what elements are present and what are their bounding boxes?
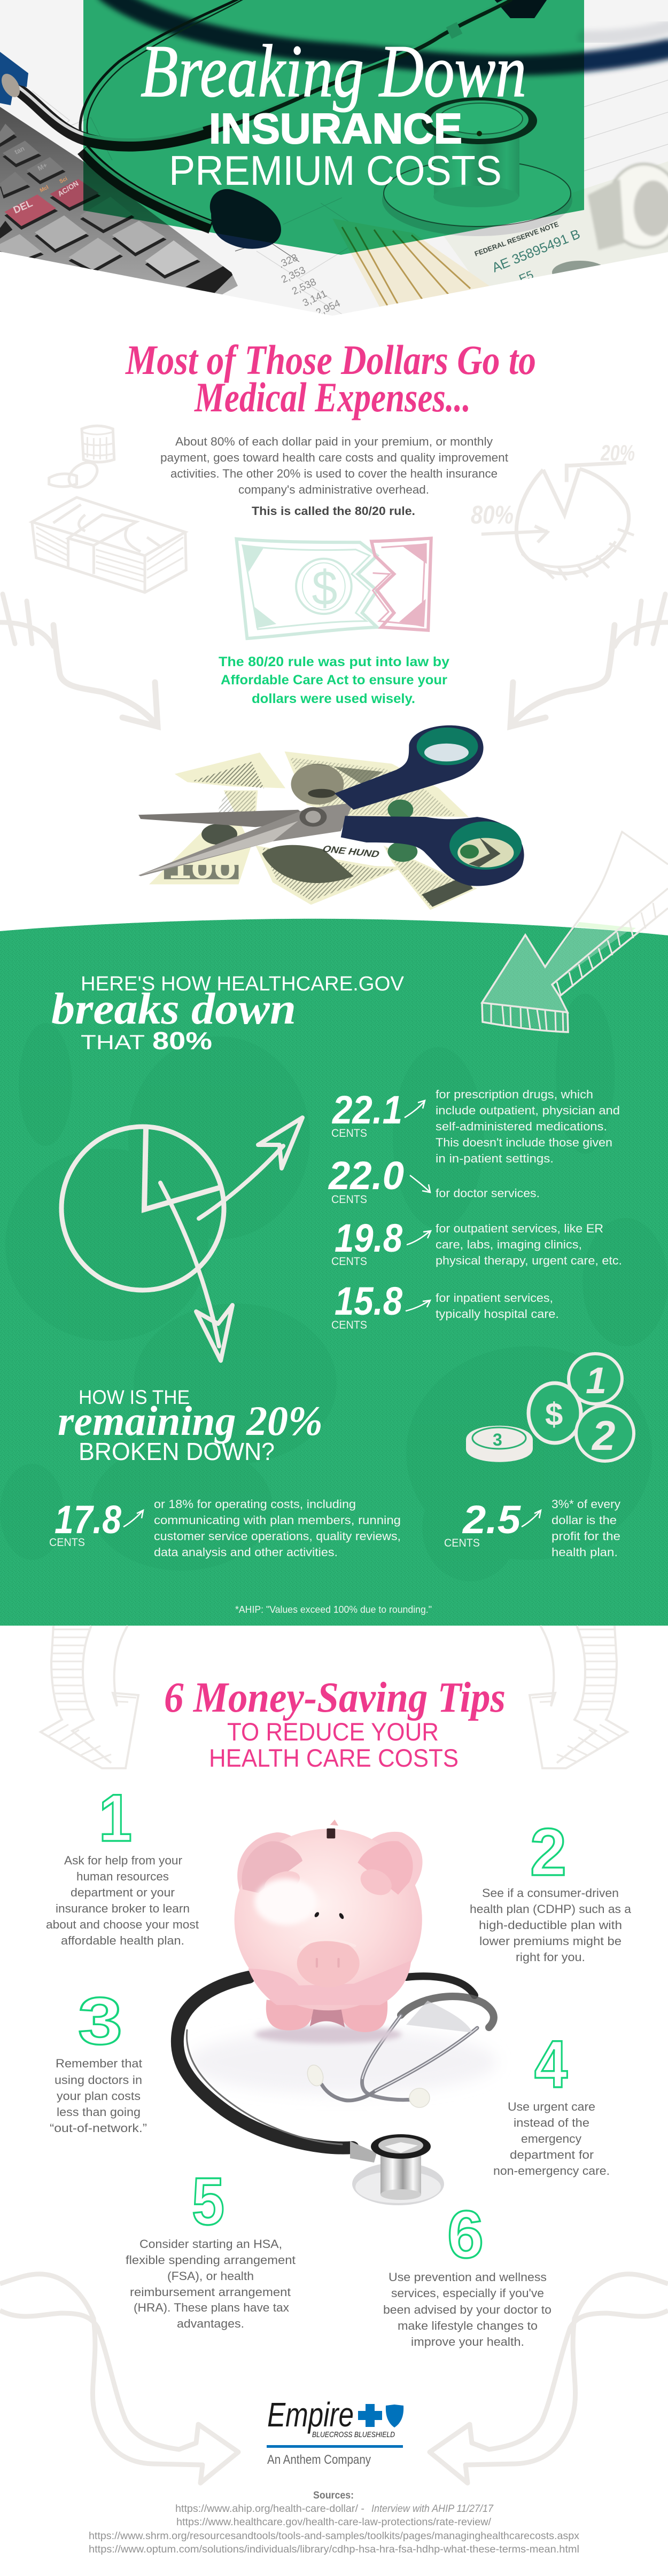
photo: chrome ear tube: [16, 85, 214, 227]
number 4: 4: [534, 2027, 568, 2102]
stat: 2.5 cents: health plan.: [552, 1545, 618, 1559]
tip 5: advantages.: [177, 2317, 244, 2330]
tip 6: services, especially if you've: [391, 2286, 544, 2300]
stat: 19.8 cents: [331, 1216, 622, 1268]
stat: 17.8 cents: communicating with plan members, running: [154, 1513, 401, 1527]
snout nostrils: [316, 1958, 318, 1968]
sources: Sources:: [313, 2490, 354, 2501]
icon: torn dollar bill: $: [312, 560, 337, 615]
heading: here's how healthcare.gov breaks down: THAT: [81, 1032, 145, 1054]
green callout: affordable care act: Affordable Care Act to ensure your: [221, 673, 447, 688]
stat: 2.5 cents: [444, 1497, 620, 1559]
doodle label: 80%: 80%: [471, 501, 514, 529]
tip 4: instead of the: [514, 2116, 589, 2129]
logo: Empire BlueCross BlueShield: An Anthem Company: [267, 2453, 371, 2467]
title line: PREMIUM COSTS: PREMIUM COSTS: [169, 147, 502, 194]
photo: ledger numbers: 3,141: [301, 288, 329, 309]
torn bill green part: [236, 539, 377, 638]
coin 3: [466, 1426, 533, 1462]
photo: navy stethoscope tube: [107, 0, 668, 65]
stat: 22.1 cents: self-administered medications.: [436, 1120, 607, 1133]
intro paragraph: activities. The other 20% is used to cover the health insurance: [170, 467, 498, 480]
tip 1: human resources: [76, 1870, 169, 1883]
photo: calculator: tan: [13, 145, 26, 156]
stat: 17.8 cents: data analysis and other activities.: [154, 1545, 338, 1559]
tip 5: (FSA), or health: [167, 2269, 254, 2283]
stat: 22.0 cents: [328, 1153, 540, 1206]
number 1: 1: [99, 1781, 132, 1855]
stat: 22.0 cents: for doctor services.: [436, 1186, 540, 1200]
doodle: right curved arrow: [510, 594, 668, 727]
ears behind: [237, 1832, 304, 1896]
tip 5: Consider starting an HSA,: [139, 2237, 282, 2251]
tip 2: high-deductible plan with: [479, 1918, 622, 1932]
stat: 17.8 cents: customer service operations, quality reviews,: [154, 1529, 401, 1543]
icon: blue cross: [358, 2404, 382, 2427]
tip 1: department or your: [71, 1886, 175, 1899]
doodle label: 20%: 20%: [600, 440, 635, 465]
photo: stethoscope chest piece: [350, 2134, 444, 2205]
icon: torn dollar bill: [236, 538, 431, 638]
intro paragraph: About 80% of each dollar paid in your premium, or monthly: [175, 435, 493, 448]
small arrow: [405, 1100, 425, 1118]
small arrow: [407, 1231, 431, 1245]
hero photo banner: [0, 0, 668, 321]
tip 4: non-emergency care.: [493, 2164, 610, 2177]
icon: coins: $: [545, 1396, 563, 1432]
title line: Breaking Down: Breaking Down: [141, 30, 526, 113]
small arrow: [522, 1510, 541, 1527]
photo: piggy bank: [235, 1820, 423, 2043]
stat: 19.8 cents: physical therapy, urgent care, etc.: [436, 1254, 622, 1267]
heading: most of those dollars: Medical Expenses...: [193, 374, 471, 420]
tip 2: [470, 1815, 632, 1964]
tip 3: your plan costs: [57, 2089, 141, 2103]
number 5: 5: [192, 2165, 224, 2239]
pie circle: [61, 1127, 224, 1290]
stat: 19.8 cents: care, labs, imaging clinics,: [436, 1238, 582, 1251]
heading: 6 money-saving tips: 6 Money-Saving Tips: [164, 1674, 506, 1721]
icon: coins: 3: [493, 1430, 502, 1449]
photo: money bills: E5: [517, 268, 535, 286]
stat: 19.8 cents: CENTS: [331, 1255, 367, 1268]
green section background: [0, 914, 668, 1626]
shadow: [254, 2026, 402, 2043]
dotted texture: [0, 914, 668, 1626]
tip 5: flexible spending arrangement: [126, 2253, 296, 2267]
stat: 15.8 cents: for inpatient services,: [436, 1291, 553, 1305]
heading: most of those dollars: Most of Those Dollars Go to: [125, 337, 536, 383]
tip 4: [493, 2027, 610, 2177]
photo: money bills: FEDERAL RESERVE NOTE: [473, 220, 560, 258]
stat: 22.0 cents: CENTS: [331, 1193, 367, 1206]
green callout: affordable care act: [219, 654, 449, 706]
tip 4: department for: [510, 2148, 594, 2161]
tip 2: lower premiums might be: [479, 1934, 622, 1948]
photo: calculator: [0, 107, 238, 295]
photo: calculator: Sci: [59, 176, 68, 185]
icon: coins: 2: [591, 1412, 615, 1459]
stat: 22.1 cents: [331, 1088, 620, 1165]
torn bill pink part: [371, 538, 431, 630]
photo: paper background: [0, 0, 668, 321]
heading: here's how healthcare.gov breaks down: HERE'S HOW HEALTHCARE.GOV: [81, 973, 405, 995]
number 2: 2: [530, 1815, 566, 1890]
photo: blue ear cap: [0, 52, 28, 105]
tip 3: [50, 1984, 147, 2135]
legs: [266, 2000, 314, 2031]
chart: hand-drawn pie with arrows: [61, 1118, 302, 1361]
photo: money bills: AE 35895491 B: [490, 227, 582, 276]
tip 5: reimbursement arrangement: [130, 2285, 291, 2299]
stat: 22.1 cents: in in-patient settings.: [436, 1152, 554, 1165]
binaural chrome tubes: [362, 2016, 411, 2100]
heading: remaining 20%: [58, 1386, 323, 1465]
stat: 15.8 cents: 15.8: [335, 1279, 403, 1323]
tip 3: “out-of-network.”: [50, 2121, 147, 2135]
tip 2: See if a consumer-driven: [482, 1886, 619, 1900]
tip 3: less than going: [57, 2105, 141, 2119]
pie arrow up-right: [199, 1118, 302, 1219]
footnote: AHIP rounding: *AHIP: "Values exceed 100% due to rounding.": [235, 1604, 432, 1615]
photo: ledger numbers: .328: [277, 252, 300, 271]
stat: 15.8 cents: CENTS: [331, 1319, 367, 1331]
pie slice lines: [144, 1129, 222, 1209]
heading: most of those dollars: [125, 337, 536, 420]
tip 2: right for you.: [516, 1950, 585, 1964]
tip 6: make lifestyle changes to: [398, 2319, 538, 2332]
stat: 22.1 cents: include outpatient, physician and: [436, 1104, 620, 1117]
stat: 22.1 cents: CENTS: [331, 1127, 367, 1139]
photo: ledger numbers: [281, 254, 340, 314]
photo: ledger numbers: 2,353: [279, 264, 307, 286]
bill engravings: ONE HUND: [321, 844, 382, 860]
logo: Empire BlueCross BlueShield: Empire: [267, 2395, 354, 2434]
stat: 2.5 cents: 3%* of every: [552, 1497, 620, 1511]
doodle: right bottom arrow: [430, 2274, 668, 2483]
tip 4: emergency: [521, 2132, 581, 2145]
bill engravings: 100: [168, 854, 236, 884]
sources: https://www.ahip.org/health-care-dollar/ -: [175, 2503, 364, 2515]
heading: 6 money-saving tips: HEALTH CARE COSTS: [209, 1744, 459, 1772]
sources: Interview with AHIP 11/27/17: [371, 2503, 494, 2515]
stat: 15.8 cents: [331, 1279, 559, 1331]
stat: 2.5 cents: 2.5: [462, 1497, 522, 1542]
snout: [297, 1939, 360, 1987]
small arrow: [410, 1175, 430, 1192]
icon: coins: [466, 1354, 634, 1462]
tip 6: [383, 2198, 552, 2348]
hero green panel: [83, 0, 584, 255]
heading: here's how healthcare.gov breaks down: breaks down: [51, 984, 296, 1034]
green callout: affordable care act: The 80/20 rule was put into law by: [219, 654, 449, 669]
photo: calculator: Mcl: [39, 184, 50, 194]
hero title: [141, 30, 526, 194]
sources: [89, 2490, 580, 2555]
stat: 17.8 cents: or 18% for operating costs, including: [154, 1497, 356, 1511]
stat: 22.0 cents: 22.0: [328, 1153, 404, 1198]
stat: 2.5 cents: dollar is the: [552, 1513, 617, 1527]
tip 5: [126, 2165, 296, 2330]
highlight: [254, 1879, 317, 1925]
stat: 2.5 cents: CENTS: [444, 1537, 480, 1549]
tip 1: affordable health plan.: [61, 1934, 184, 1947]
sources: https://www.healthcare.gov/health-care-law-protections/rate-review/: [176, 2517, 492, 2528]
stat: 17.8 cents: CENTS: [49, 1536, 85, 1549]
pie arrow down: [160, 1183, 232, 1361]
intro paragraph: company's administrative overhead.: [238, 483, 429, 496]
tip 6: improve your health.: [411, 2335, 524, 2348]
sources: https://www.shrm.org/resourcesandtools/tools-and-samples/toolkits/pages/managinghealthcarecosts.aspx: [89, 2531, 580, 2542]
stat: 22.1 cents: This doesn't include those given: [436, 1136, 612, 1149]
ear inner: [242, 1841, 302, 1893]
cut bill pieces: [149, 752, 477, 910]
tip 1: about and choose your most: [46, 1918, 199, 1931]
icon: blue shield: [386, 2405, 403, 2427]
photo: ledger numbers: 2,954: [314, 298, 343, 319]
stat: 19.8 cents: for outpatient services, like ER: [436, 1222, 603, 1235]
doodle: left bottom arrow: [0, 2274, 238, 2483]
photo: scissors cutting money: [138, 725, 524, 910]
stat: 2.5 cents: profit for the: [552, 1529, 620, 1543]
photo: stethoscope ear tips: [305, 2063, 430, 2107]
number 3: 3: [78, 1984, 122, 2058]
photo: ledger numbers: 2,538: [290, 276, 318, 298]
small arrow: [123, 1510, 143, 1527]
body: [235, 1829, 422, 2010]
tip 6: been advised by your doctor to: [383, 2303, 552, 2316]
stat: 17.8 cents: 17.8: [55, 1497, 122, 1542]
coin 2: [576, 1406, 634, 1461]
logo: Empire BlueCross BlueShield: BLUECROSS BLUESHIELD: [312, 2430, 395, 2439]
heading: here's how healthcare.gov breaks down: [51, 973, 405, 1055]
number 6: 6: [447, 2198, 484, 2272]
photo: calculator: M+: [36, 161, 49, 173]
title line: INSURANCE: INSURANCE: [209, 105, 462, 152]
doodle: left curved arrow: [0, 594, 158, 727]
doodle: left hatched arrow: [41, 1626, 138, 1768]
tip 6: Use prevention and wellness: [389, 2270, 547, 2284]
rule callout: This is called the 80/20 rule.: [252, 504, 415, 518]
stat: 19.8 cents: 19.8: [335, 1216, 403, 1260]
heading: remaining 20%: BROKEN DOWN?: [79, 1438, 275, 1465]
sources: https://www.optum.com/solutions/individuals/library/cdhp-hsa-hra-fsa-hdhp-what-these-terms-mean.html: [89, 2544, 579, 2555]
scissor blades: [138, 802, 354, 876]
coin dollar: [529, 1383, 581, 1443]
tip 3: Remember that: [56, 2057, 142, 2070]
tip 4: Use urgent care: [508, 2100, 595, 2113]
photo: stethoscope tube around piggy: [177, 1976, 497, 2148]
tip 2: health plan (CDHP) such as a: [470, 1902, 632, 1916]
eyes: [314, 1911, 320, 1918]
tip 5: (HRA). These plans have tax: [134, 2301, 289, 2314]
tip 1: Ask for help from your: [64, 1854, 182, 1867]
green callout: affordable care act: dollars were used wisely.: [252, 691, 415, 706]
intro paragraph: [160, 435, 508, 518]
heading: remaining 20%: HOW IS THE: [79, 1386, 190, 1408]
stat: 17.8 cents: [49, 1497, 401, 1559]
intro paragraph: payment, goes toward health care costs and quality improvement: [160, 451, 508, 464]
scissor handles: [335, 725, 524, 886]
icon: coins: 1: [586, 1360, 607, 1401]
heading: 6 money-saving tips: [164, 1674, 506, 1772]
faint background shapes: [0, 994, 668, 1581]
heading: remaining 20%: remaining 20%: [58, 1398, 323, 1444]
photo: calculator: AC/ON: [56, 179, 80, 198]
arrow: large hollow arrow: [482, 832, 668, 1032]
heading: here's how healthcare.gov breaks down: 80%: [152, 1027, 212, 1055]
bill engravings: [164, 758, 473, 907]
logo: Empire BlueCross BlueShield: [267, 2395, 403, 2467]
photo: thin binaural tubes: [80, 0, 511, 141]
coin 1: [569, 1354, 622, 1404]
tip 3: using doctors in: [55, 2073, 142, 2087]
eye patches: [261, 1867, 303, 1898]
stat: 22.1 cents: 22.1: [331, 1088, 402, 1132]
heading: 6 money-saving tips: TO REDUCE YOUR: [227, 1718, 439, 1746]
doodle: money stack: [32, 497, 186, 592]
stat: 15.8 cents: typically hospital care.: [436, 1307, 559, 1321]
photo: chest piece: [382, 97, 572, 236]
doodle: coin stack: [49, 426, 114, 489]
tip 1: insurance broker to learn: [56, 1902, 190, 1915]
photo: money bills: [332, 161, 668, 307]
doodle: right hatched arrow: [530, 1626, 627, 1768]
coin slot: [327, 1829, 335, 1838]
photo: dark ear tip: [210, 189, 281, 249]
small arrow: [406, 1300, 430, 1311]
tip 1: [46, 1781, 199, 1947]
photo: printed chart lines: [32, 80, 668, 321]
stat: 22.1 cents: for prescription drugs, which: [436, 1088, 593, 1101]
photo: calculator: DEL: [11, 197, 34, 216]
doodle: pie chart 80/20: [471, 440, 635, 580]
